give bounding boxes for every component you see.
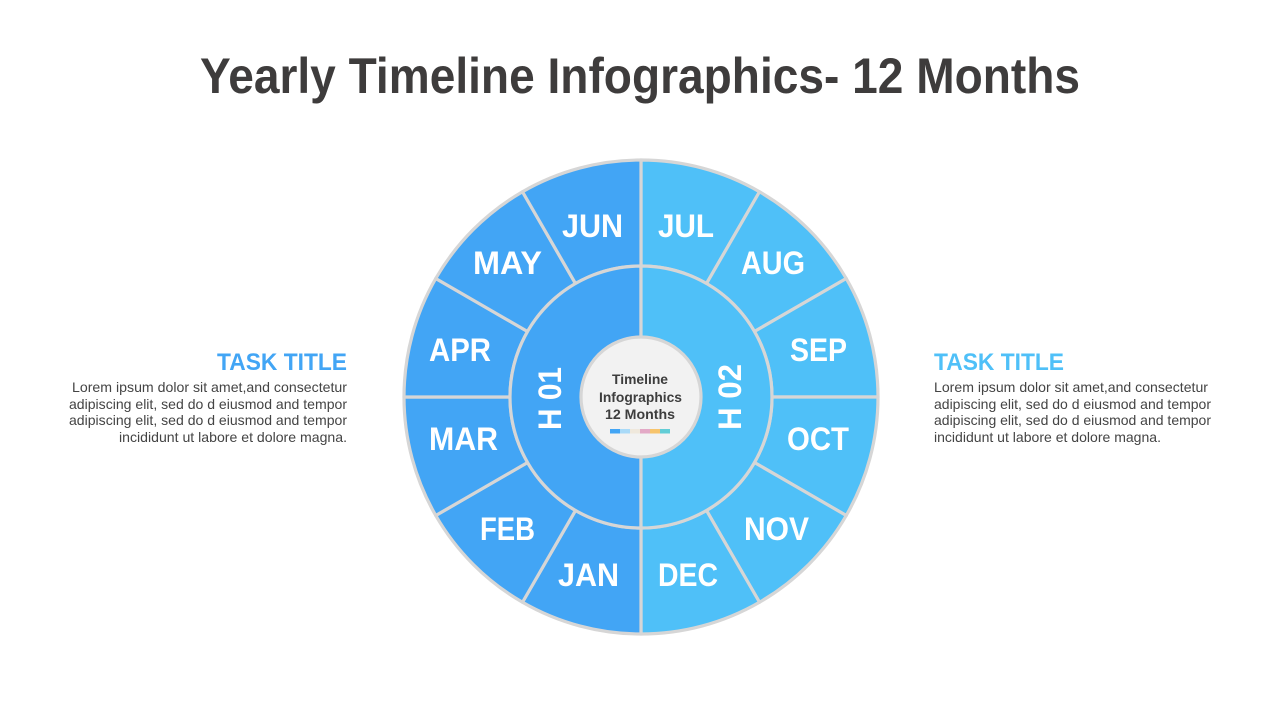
segment: AUG: AUG (741, 245, 805, 281)
right body text: adipiscing elit, sed do d eiusmod and tempor (934, 412, 1211, 428)
colour key bar (610, 429, 670, 434)
segment: APR (404, 278, 528, 397)
segment: MAY: MAY (473, 245, 542, 281)
left body text: adipiscing elit, sed do d eiusmod and tempor (69, 412, 347, 428)
half-year segment: H 01: H 01 (532, 367, 568, 430)
left body text: adipiscing elit, sed do d eiusmod and tempor (69, 396, 347, 412)
segment: SEP: SEP (790, 332, 847, 368)
segment: SEP (754, 278, 878, 397)
segment: AUG (706, 192, 846, 332)
right body text: adipiscing elit, sed do d eiusmod and tempor (934, 396, 1211, 412)
segment: DEC (641, 510, 760, 634)
segment: NOV: NOV (744, 511, 810, 547)
segment: MAY (436, 192, 576, 332)
segment: MAR: MAR (429, 421, 498, 457)
segment: FEB (436, 462, 576, 602)
right body text: Lorem ipsum dolor sit amet,and consectetur (934, 379, 1208, 395)
half-year segment: H 02: H 02 (712, 364, 748, 430)
segment: JUL (641, 160, 760, 284)
half-year segment: H 01 (510, 266, 641, 528)
segment: MAR (404, 397, 528, 516)
half-year segment: H 02 (641, 266, 772, 528)
center label (599, 371, 682, 422)
left text block (69, 349, 347, 445)
left body text: Lorem ipsum dolor sit amet,and consectetur (72, 379, 347, 395)
segment: OCT: OCT (787, 421, 849, 457)
left body text: incididunt ut labore et dolore magna. (119, 429, 347, 445)
left body text (69, 379, 347, 445)
segment: JUN (522, 160, 641, 284)
segment: FEB: FEB (480, 511, 535, 547)
radial timeline wheel (404, 160, 878, 634)
segment: JAN: JAN (558, 557, 619, 593)
right body text: incididunt ut labore et dolore magna. (934, 429, 1161, 445)
right text block (934, 349, 1211, 445)
segment: OCT (754, 397, 878, 516)
right heading: TASK TITLE (934, 349, 1064, 376)
segment: NOV (706, 462, 846, 602)
right body text (934, 379, 1211, 445)
center badge (581, 337, 701, 457)
segment: JUN: JUN (562, 208, 623, 244)
title: Yearly Timeline Infographics- 12 Months (200, 48, 1080, 104)
segment: DEC: DEC (658, 557, 718, 593)
segment: JAN (522, 510, 641, 634)
segment: APR: APR (429, 332, 491, 368)
left heading: TASK TITLE (217, 349, 347, 376)
center label: Infographics (599, 389, 682, 405)
center label: Timeline (612, 371, 668, 387)
center label: 12 Months (605, 406, 675, 422)
segment: JUL: JUL (658, 208, 714, 244)
